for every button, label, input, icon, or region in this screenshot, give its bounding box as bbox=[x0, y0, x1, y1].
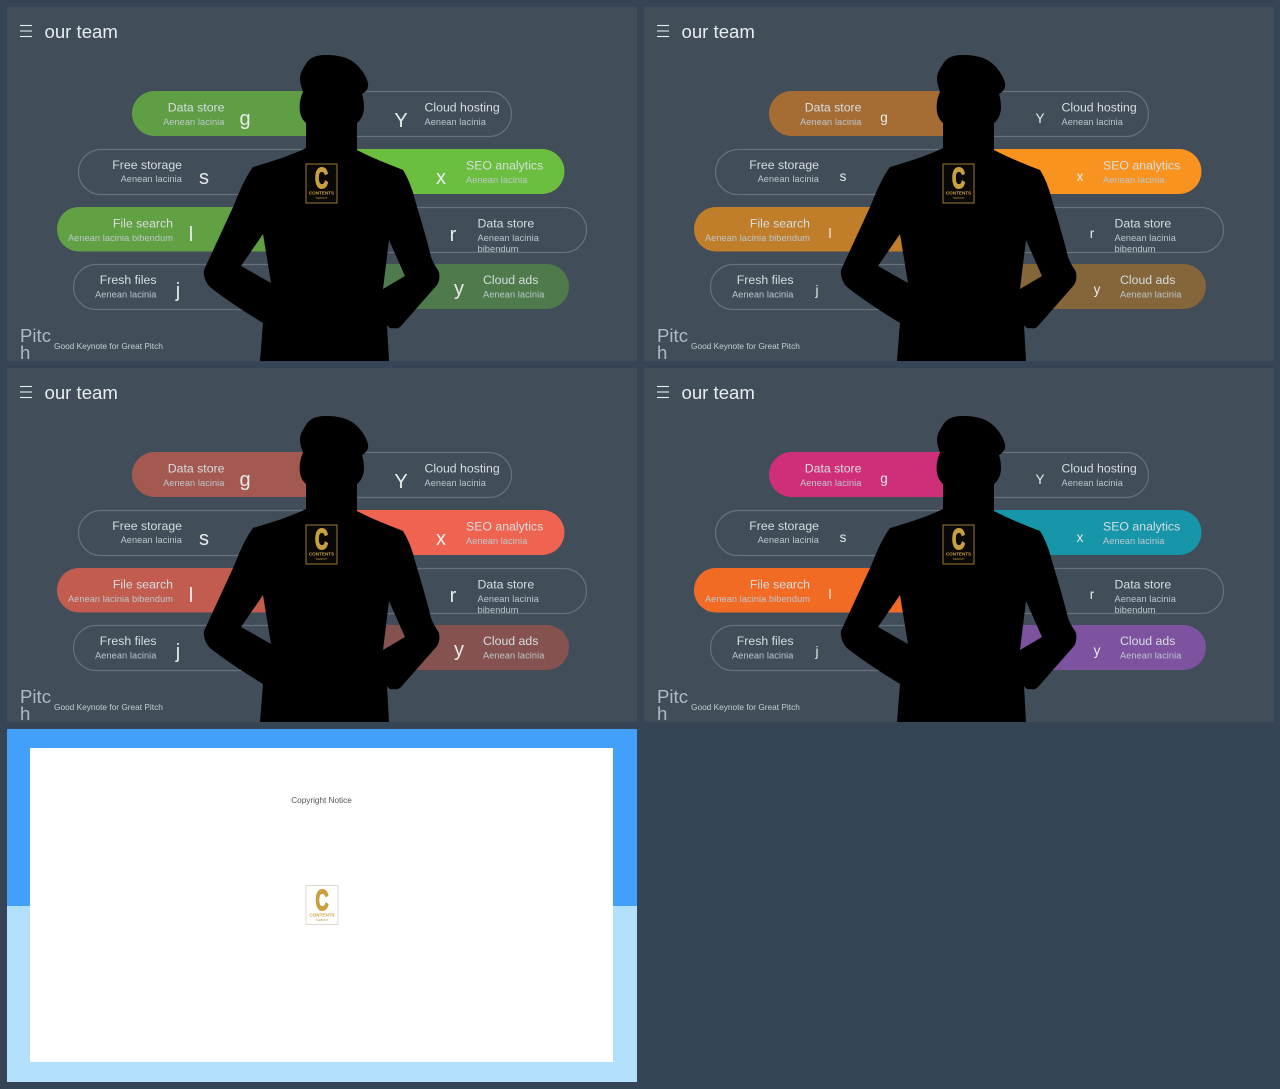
pill: cloud ads: y bbox=[1094, 282, 1101, 297]
pill: cloud ads bbox=[957, 625, 1206, 670]
logo badge: CONTENTS bbox=[946, 552, 971, 556]
pill: free storage: s bbox=[199, 167, 209, 189]
pill: cloud hosting: Y bbox=[1035, 111, 1045, 126]
pill: seo analytics: Aenean lacinia bbox=[466, 536, 528, 546]
pill: file search: Aenean lacinia bibendum bbox=[705, 233, 810, 243]
pill: free storage bbox=[716, 510, 966, 556]
silhouette bbox=[841, 416, 1076, 722]
pill: cloud ads: Aenean lacinia bbox=[483, 650, 545, 660]
pill: free storage: Free storage bbox=[112, 519, 182, 533]
pill: cloud hosting bbox=[320, 452, 512, 498]
pill: seo analytics: SEO analytics bbox=[1103, 158, 1180, 172]
pill: file search: File search bbox=[750, 216, 810, 230]
pill: data store right: Aenean lacinia bbox=[478, 233, 540, 243]
pill: file search: Aenean lacinia bibendum bbox=[705, 594, 810, 604]
pill: data store right: Data store bbox=[1114, 578, 1171, 592]
pill: data store right bbox=[320, 208, 586, 254]
pill: file search: Aenean lacinia bibendum bbox=[68, 594, 173, 604]
pill: data store right: r bbox=[450, 585, 457, 607]
pill: data store right: Data store bbox=[478, 578, 534, 592]
pill: data store: Data store bbox=[168, 462, 225, 476]
heading: our team bbox=[682, 382, 755, 403]
pill: data store right bbox=[320, 568, 586, 615]
pill: data store right: bibendum bbox=[478, 605, 519, 615]
pill: seo analytics bbox=[320, 510, 564, 555]
pill: fresh files: j bbox=[175, 280, 180, 302]
footer brand: Pitc bbox=[657, 686, 688, 707]
silhouette bbox=[204, 416, 439, 722]
pill: file search: l bbox=[828, 226, 832, 241]
footer tagline: Good Keynote for Great Pitch bbox=[54, 341, 163, 351]
footer brand bbox=[20, 686, 51, 724]
pill: cloud ads: Aenean lacinia bbox=[483, 290, 545, 300]
pill: data store bbox=[132, 452, 332, 497]
panel: copyright slide bbox=[7, 729, 637, 1082]
logo badge: TAEBOOT bbox=[952, 557, 965, 561]
pill: data store: Aenean lacinia bbox=[163, 117, 225, 127]
footer brand: h bbox=[20, 342, 30, 363]
pill: free storage: Aenean lacinia bbox=[758, 174, 820, 184]
pill: file search: l bbox=[828, 587, 832, 602]
pill: free storage: Aenean lacinia bbox=[121, 535, 183, 545]
pill: seo analytics: SEO analytics bbox=[466, 158, 543, 172]
pill: data store right: Data store bbox=[478, 216, 534, 230]
pill: data store right: Data store bbox=[1114, 216, 1171, 230]
panel: our team red bbox=[7, 368, 637, 724]
pill: data store right: bibendum bbox=[1114, 244, 1156, 254]
pill: cloud hosting: Aenean lacinia bbox=[424, 478, 487, 488]
pill: fresh files: Aenean lacinia bbox=[732, 290, 794, 300]
pill: free storage: s bbox=[840, 169, 847, 184]
heading: our team bbox=[682, 21, 755, 42]
pill: cloud hosting: Cloud hosting bbox=[424, 462, 500, 476]
footer brand: Pitc bbox=[20, 686, 51, 707]
pill: cloud ads bbox=[320, 625, 569, 670]
silhouette bbox=[204, 55, 439, 361]
icon: menu bbox=[657, 26, 669, 36]
pill: data store bbox=[132, 91, 332, 136]
pill: cloud ads bbox=[320, 264, 569, 309]
pill: cloud hosting: Y bbox=[1035, 472, 1045, 487]
logo badge: CONTENTS bbox=[309, 190, 334, 196]
pill: data store bbox=[769, 91, 969, 136]
footer brand: Pitc bbox=[657, 325, 688, 346]
logo badge bbox=[306, 163, 337, 203]
pill: fresh files: Fresh files bbox=[737, 634, 794, 648]
pill: data store: g bbox=[239, 469, 251, 491]
panel: our team multicolour bbox=[644, 368, 1274, 724]
pill: data store right: bibendum bbox=[1114, 605, 1156, 615]
footer tagline: Good Keynote for Great Pitch bbox=[691, 702, 800, 712]
icon: menu bbox=[20, 26, 32, 36]
pill: fresh files bbox=[74, 626, 324, 670]
logo badge: C bbox=[315, 524, 328, 556]
pill: free storage: Free storage bbox=[112, 158, 182, 172]
pill: seo analytics: x bbox=[436, 167, 446, 189]
pill: fresh files: j bbox=[814, 283, 818, 298]
pill: data store: Data store bbox=[805, 462, 862, 476]
pill: data store bbox=[769, 452, 969, 497]
footer brand: h bbox=[20, 703, 30, 724]
pill: seo analytics: x bbox=[1077, 530, 1084, 545]
pill: data store right bbox=[957, 208, 1224, 254]
pill: cloud ads: Aenean lacinia bbox=[1120, 290, 1182, 300]
footer brand bbox=[657, 686, 688, 724]
footer brand: h bbox=[657, 703, 667, 724]
pill: cloud hosting: Cloud hosting bbox=[424, 100, 500, 114]
pill: data store right bbox=[957, 568, 1224, 615]
pill: data store: Aenean lacinia bbox=[163, 478, 225, 488]
pill: free storage: s bbox=[840, 530, 847, 545]
pill: seo analytics: Aenean lacinia bbox=[1103, 175, 1165, 185]
pill: cloud hosting: Cloud hosting bbox=[1062, 462, 1137, 476]
pill: seo analytics: Aenean lacinia bbox=[466, 175, 528, 185]
pill: file search: File search bbox=[113, 578, 173, 592]
pill: free storage: s bbox=[199, 528, 209, 550]
pill: file search: File search bbox=[750, 578, 810, 592]
pill: cloud ads: Cloud ads bbox=[483, 273, 538, 287]
pill: file search bbox=[694, 207, 964, 252]
logo badge: TAEBOOT bbox=[315, 196, 328, 200]
logo badge: CONTENTS bbox=[946, 190, 971, 196]
footer brand bbox=[20, 325, 51, 363]
pill: fresh files: Aenean lacinia bbox=[732, 650, 794, 660]
logo badge: TAEBOOT bbox=[315, 557, 328, 561]
pill: free storage bbox=[716, 150, 966, 194]
pill: file search: l bbox=[189, 585, 193, 607]
panel: our team orange bbox=[644, 7, 1274, 363]
pill: fresh files: Fresh files bbox=[100, 273, 156, 287]
pill: file search: File search bbox=[113, 216, 173, 230]
pill: data store right: Aenean lacinia bbox=[1114, 594, 1177, 604]
pill: file search: l bbox=[189, 224, 193, 246]
logo: light badge bbox=[306, 885, 338, 924]
pill: cloud hosting: Aenean lacinia bbox=[1062, 117, 1124, 127]
pill: file search bbox=[57, 207, 327, 252]
pill: free storage: Aenean lacinia bbox=[758, 535, 820, 545]
pill: data store right: Aenean lacinia bbox=[1114, 233, 1177, 243]
pill: seo analytics: SEO analytics bbox=[466, 520, 543, 534]
pill: fresh files bbox=[74, 264, 324, 310]
pill: free storage: Free storage bbox=[749, 519, 819, 533]
pill: data store: g bbox=[880, 471, 888, 486]
pill: cloud hosting: Aenean lacinia bbox=[424, 117, 487, 127]
logo badge: C bbox=[315, 163, 328, 195]
pill: data store: g bbox=[239, 108, 251, 130]
pill: cloud ads: y bbox=[1094, 643, 1101, 658]
footer brand: h bbox=[657, 342, 667, 363]
pill: data store: Aenean lacinia bbox=[800, 117, 862, 127]
pill: cloud hosting: Cloud hosting bbox=[1062, 100, 1137, 114]
logo: light badge: CONTENTS bbox=[309, 912, 335, 918]
logo badge: CONTENTS bbox=[309, 552, 334, 556]
pill: fresh files: Fresh files bbox=[737, 273, 794, 287]
pill: data store: Data store bbox=[168, 100, 225, 114]
panel: our team green bbox=[7, 7, 637, 363]
logo: light badge: C bbox=[316, 885, 329, 917]
pill: fresh files: j bbox=[814, 644, 818, 659]
pill: fresh files: Aenean lacinia bbox=[95, 650, 157, 660]
pill: file search: Aenean lacinia bibendum bbox=[68, 233, 173, 243]
pill: cloud ads: y bbox=[454, 639, 464, 661]
pill: data store: Data store bbox=[805, 100, 862, 114]
pill: seo analytics bbox=[957, 510, 1202, 555]
pill: cloud hosting bbox=[957, 92, 1148, 136]
heading: our team bbox=[44, 382, 118, 403]
pill: free storage bbox=[78, 150, 328, 194]
pill: fresh files bbox=[710, 626, 960, 670]
pill: cloud hosting: Y bbox=[394, 110, 408, 132]
pill: file search bbox=[694, 568, 964, 612]
pill: cloud ads: Cloud ads bbox=[483, 634, 538, 648]
pill: seo analytics bbox=[320, 149, 564, 194]
footer brand bbox=[657, 325, 688, 363]
pill: data store right: Aenean lacinia bbox=[478, 594, 540, 604]
pill: free storage bbox=[78, 510, 328, 556]
pill: fresh files: j bbox=[175, 641, 180, 663]
pill: seo analytics: SEO analytics bbox=[1103, 520, 1180, 534]
pill: data store right: r bbox=[1090, 226, 1095, 241]
pill: fresh files: Fresh files bbox=[100, 634, 156, 648]
logo badge bbox=[306, 524, 337, 564]
icon: menu bbox=[20, 386, 32, 398]
pill: free storage: Aenean lacinia bbox=[121, 174, 183, 184]
logo: light badge: TAEBOOT bbox=[316, 918, 329, 922]
pill: data store right: bibendum bbox=[478, 244, 519, 254]
pill: cloud hosting: Y bbox=[394, 471, 408, 493]
pill: free storage: Free storage bbox=[749, 158, 819, 172]
logo badge bbox=[943, 163, 974, 203]
icon: menu bbox=[657, 386, 669, 398]
copyright heading: Copyright Notice bbox=[291, 796, 352, 805]
pill: cloud hosting bbox=[320, 92, 512, 136]
pill: data store right: r bbox=[1090, 587, 1095, 602]
pill: data store right: r bbox=[450, 224, 457, 246]
footer tagline: Good Keynote for Great Pitch bbox=[54, 702, 163, 712]
logo badge: TAEBOOT bbox=[952, 196, 965, 200]
heading: our team bbox=[44, 21, 118, 42]
pill: data store: Aenean lacinia bbox=[800, 478, 862, 488]
pill: seo analytics: x bbox=[436, 528, 446, 550]
pill: fresh files bbox=[710, 264, 960, 310]
pill: cloud hosting bbox=[957, 452, 1148, 498]
logo badge: C bbox=[952, 163, 965, 195]
pill: file search bbox=[57, 568, 327, 612]
silhouette bbox=[841, 55, 1076, 361]
pill: seo analytics: x bbox=[1077, 169, 1084, 184]
logo badge bbox=[943, 524, 974, 564]
pill: data store: g bbox=[880, 110, 888, 125]
pill: cloud hosting: Aenean lacinia bbox=[1062, 478, 1124, 488]
footer brand: Pitc bbox=[20, 325, 51, 346]
pill: cloud ads bbox=[957, 264, 1206, 309]
pill: cloud ads: y bbox=[454, 278, 464, 300]
pill: seo analytics bbox=[957, 149, 1202, 194]
pill: cloud ads: Cloud ads bbox=[1120, 273, 1175, 287]
pill: cloud ads: Aenean lacinia bbox=[1120, 650, 1182, 660]
pill: cloud ads: Cloud ads bbox=[1120, 634, 1175, 648]
footer tagline: Good Keynote for Great Pitch bbox=[691, 341, 800, 351]
pill: fresh files: Aenean lacinia bbox=[95, 290, 157, 300]
logo badge: C bbox=[952, 524, 965, 556]
pill: seo analytics: Aenean lacinia bbox=[1103, 536, 1165, 546]
